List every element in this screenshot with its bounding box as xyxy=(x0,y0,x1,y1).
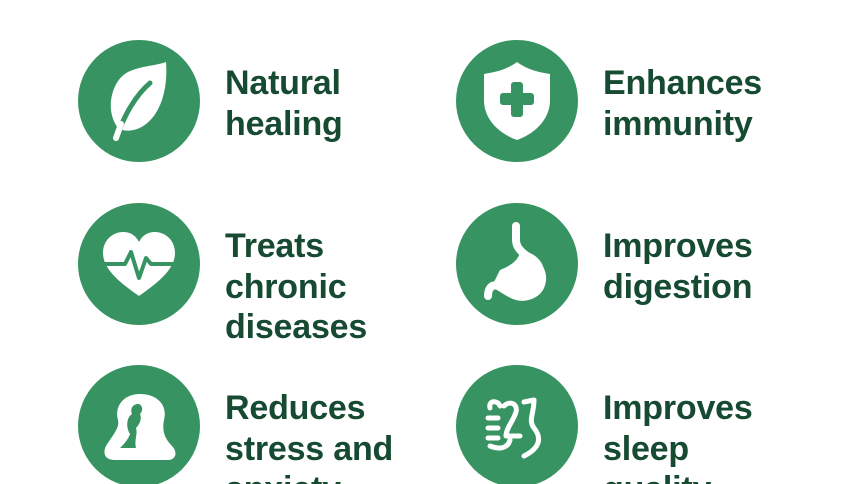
text: Enhances immunity: Enhances xyxy=(603,64,762,102)
icon: shield xyxy=(456,40,578,162)
text: Enhances immunity: immunity xyxy=(603,104,753,142)
text: Enhances immunity xyxy=(603,64,762,142)
text: Natural healing: healing xyxy=(225,104,343,142)
icon: leaf xyxy=(78,40,200,162)
text: Improves digestion: digestion xyxy=(603,268,752,306)
text: Improves sleep quality: Improves xyxy=(603,389,753,427)
text: Treats chronic diseases: diseases xyxy=(225,308,367,346)
text: Natural healing xyxy=(225,64,343,142)
text: Reduces stress and anxiety xyxy=(225,389,393,484)
text: Improves digestion xyxy=(603,227,753,306)
text: Treats chronic diseases: chronic xyxy=(225,268,346,306)
text: Reduces stress and anxiety: stress and xyxy=(225,430,393,468)
icon: head silhouette xyxy=(78,365,200,484)
icon: sleep xyxy=(456,365,578,484)
text: Improves digestion: Improves xyxy=(603,227,753,265)
icon: heart with pulse xyxy=(78,203,200,325)
text: Reduces stress and anxiety: Reduces xyxy=(225,389,365,427)
text: Natural healing: Natural xyxy=(225,64,341,102)
text: Improves sleep quality: sleep xyxy=(603,430,689,468)
text: Improves sleep quality xyxy=(603,389,753,484)
text: Treats chronic diseases xyxy=(225,227,367,346)
icon: stomach xyxy=(456,203,578,325)
text: Treats chronic diseases: Treats xyxy=(225,227,324,265)
